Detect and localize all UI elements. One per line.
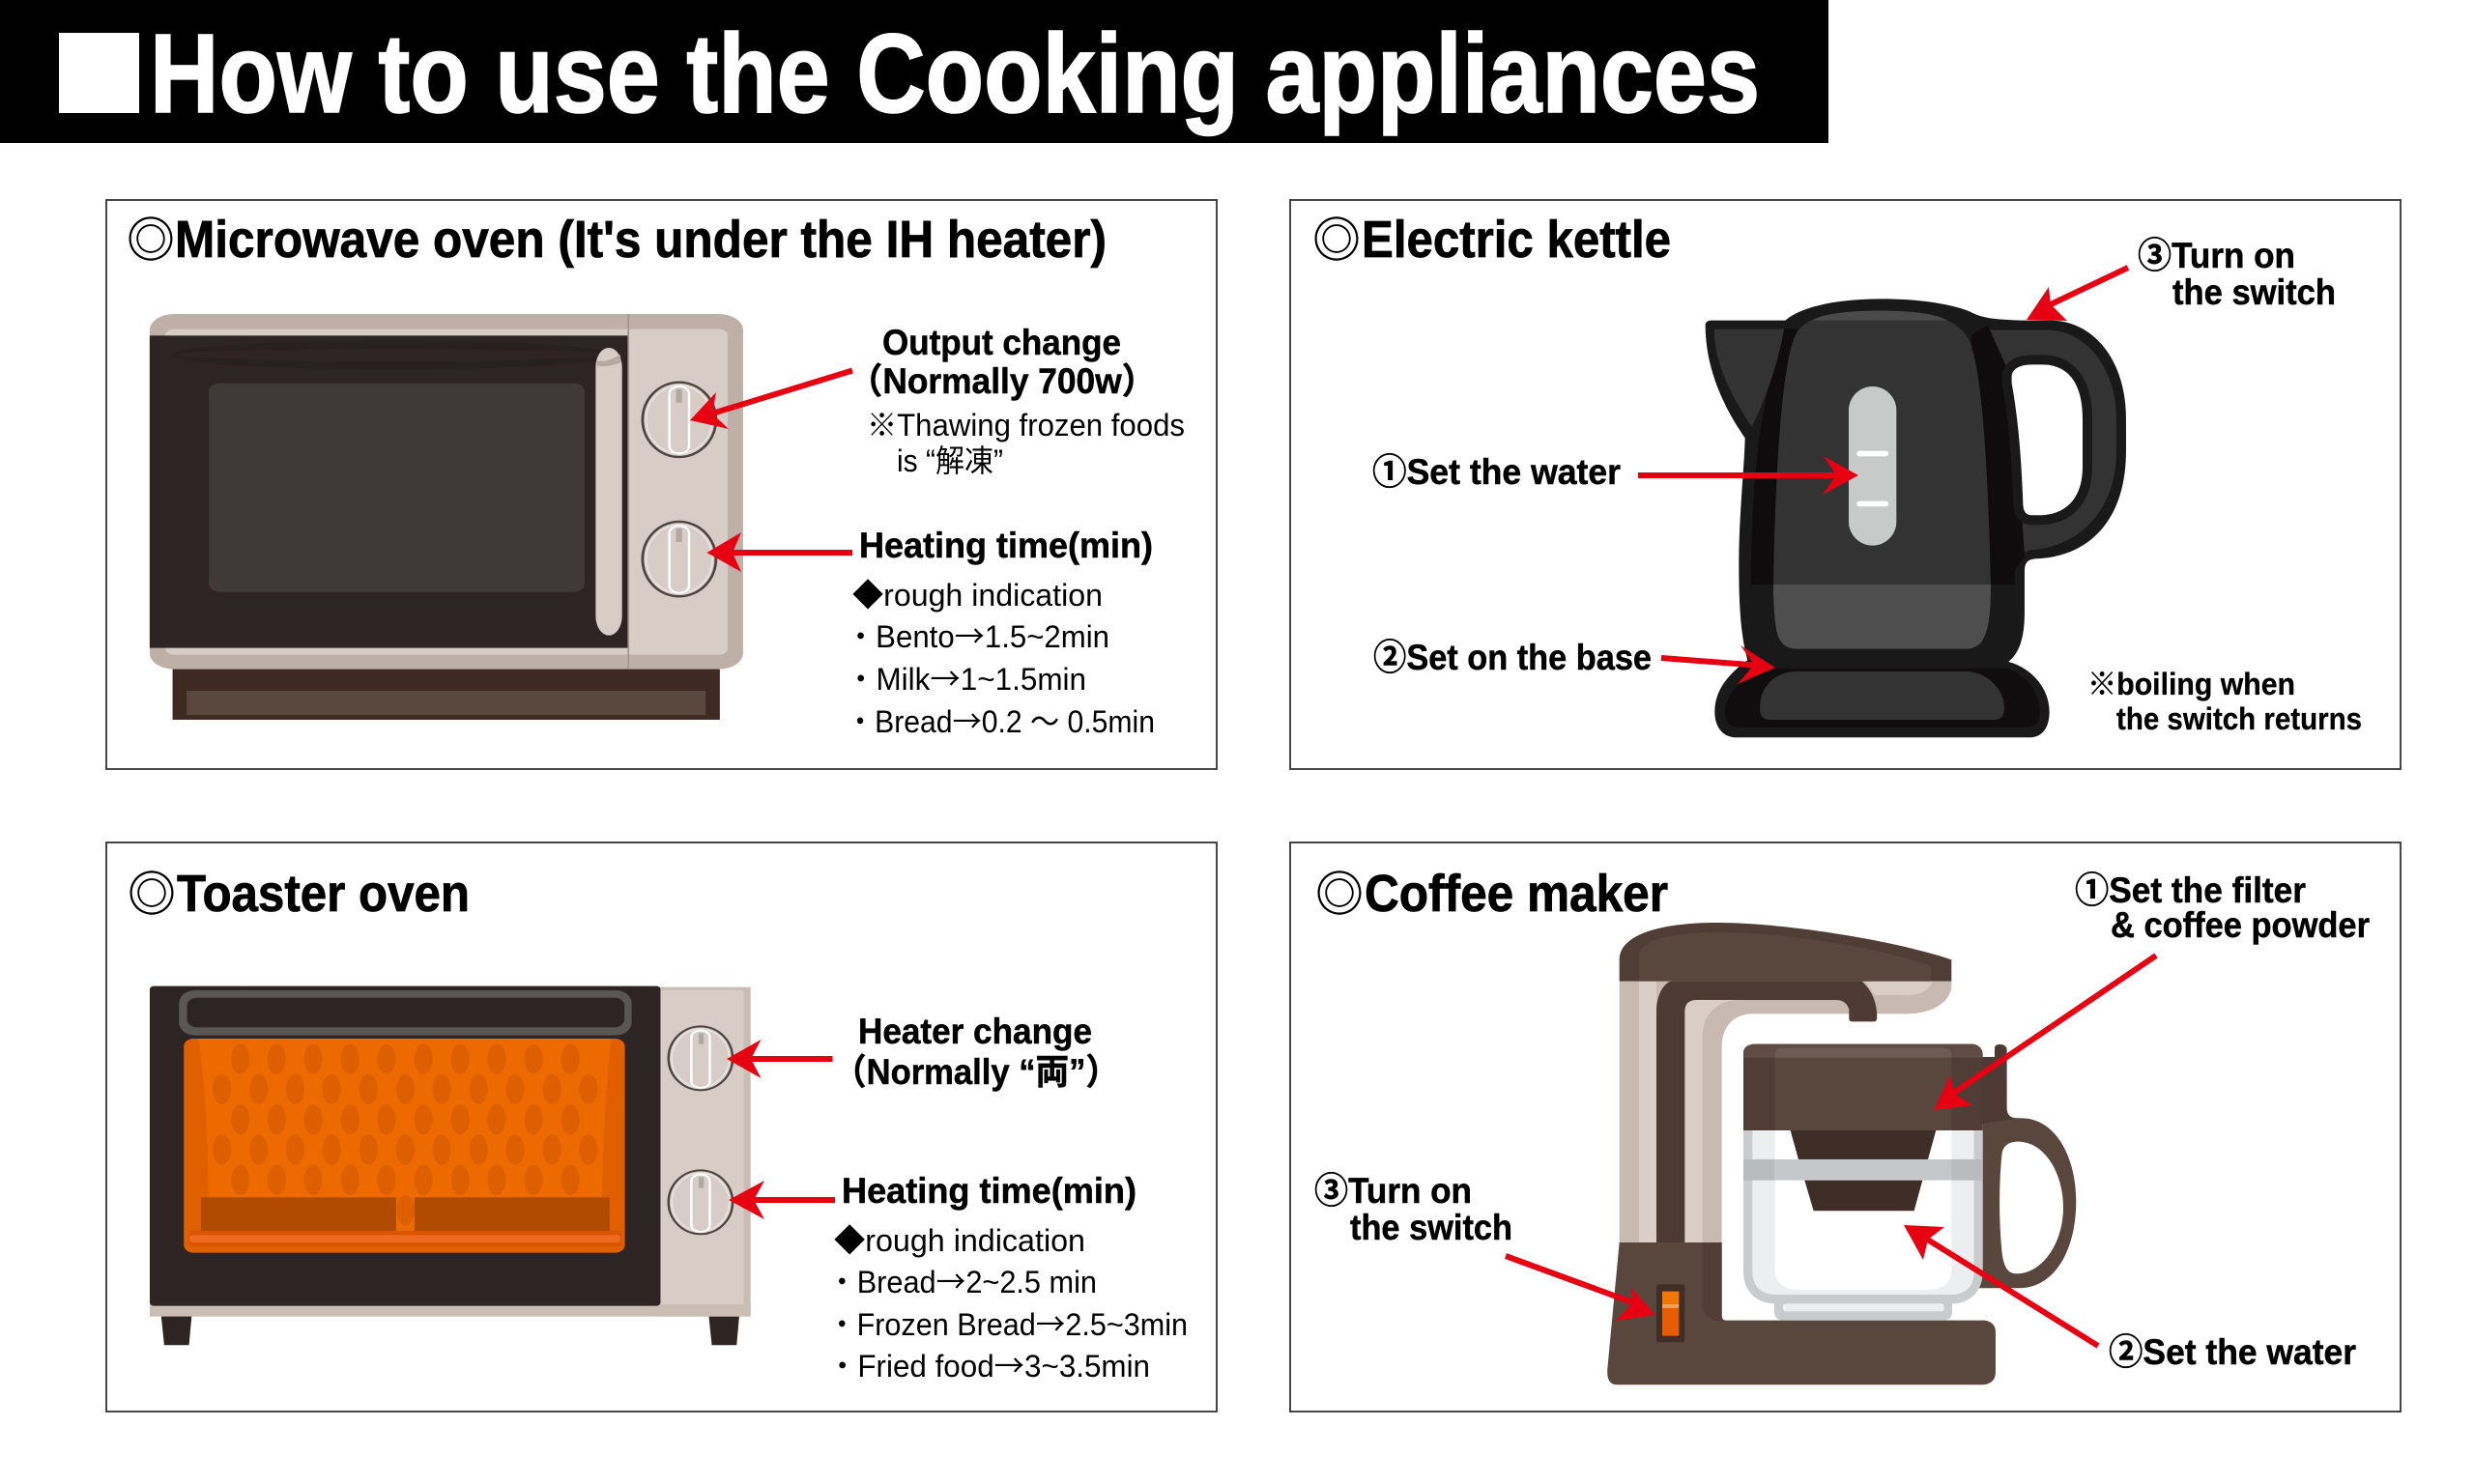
list: rough indication: ・Bento→1.5~2min bbox=[846, 613, 1109, 657]
arrow: set the water bbox=[1638, 456, 1858, 495]
list: rough indication: ・Milk→1~1.5min bbox=[846, 655, 1086, 699]
heading: coffee maker bbox=[1315, 856, 1668, 926]
heading: toaster oven: Toaster oven bbox=[177, 865, 470, 923]
panel: coffee maker bbox=[1290, 842, 2401, 1412]
heading: microwave oven: ◎ bbox=[127, 202, 175, 271]
note: boiling bbox=[2087, 667, 2362, 736]
label: heater change: （Normally “両”） bbox=[833, 1052, 1119, 1092]
note: boiling: ※boiling when bbox=[2087, 667, 2295, 701]
label: output change bbox=[849, 323, 1156, 401]
label: heating time: Heating time(min) bbox=[859, 526, 1153, 565]
panel: microwave oven bbox=[106, 200, 1217, 769]
note: boiling: the switch returns bbox=[2116, 701, 2362, 736]
label: turn on the switch: the switch bbox=[2172, 272, 2336, 312]
label: set on the base: ②Set on the base bbox=[1373, 638, 1652, 677]
label: set the water: ①Set the water bbox=[1372, 452, 1621, 492]
heading: microwave oven: Microwave oven (It's under the IH heater) bbox=[175, 211, 1107, 269]
arrow: turn on the switch bbox=[1506, 1256, 1655, 1321]
note: thawing: is “解凍” bbox=[897, 443, 1003, 478]
list: rough indication: ◆rough indication bbox=[852, 578, 1103, 613]
arrow: filter and coffee powder bbox=[1934, 956, 2156, 1110]
list: rough indication bbox=[846, 578, 1155, 742]
label: output change: （Normally 700w） bbox=[849, 361, 1156, 401]
list: rough indication: ・Fried food→3~3.5min bbox=[827, 1342, 1150, 1386]
list: rough indication: ・Bread→0.2 〜 0.5min bbox=[846, 698, 1155, 742]
note: thawing: ※Thawing frozen foods bbox=[867, 408, 1185, 442]
list: rough indication: ・Bread→2~2.5 min bbox=[827, 1258, 1097, 1302]
list: rough indication: ◆rough indication bbox=[834, 1223, 1085, 1258]
panel: electric kettle bbox=[1290, 200, 2401, 769]
label: turn on the switch bbox=[2138, 236, 2336, 312]
arrow: heater dial bbox=[727, 1040, 833, 1078]
heading: coffee maker: Coffee maker bbox=[1365, 865, 1668, 923]
heading: toaster oven bbox=[128, 856, 470, 926]
arrow: output dial bbox=[690, 371, 852, 429]
arrow: set on the base bbox=[1661, 645, 1775, 684]
label: set the water: ②Set the water bbox=[2109, 1332, 2356, 1372]
arrow: time dial bbox=[729, 1181, 835, 1219]
label: set the filter and coffee powder bbox=[2075, 870, 2370, 945]
list: rough indication: ・Frozen Bread→2.5~3min bbox=[827, 1300, 1188, 1345]
list: rough indication bbox=[827, 1223, 1188, 1386]
title banner: How to use the Cooking appliances bbox=[150, 11, 1760, 136]
label: heater change bbox=[833, 1012, 1119, 1092]
label: set the filter and coffee powder: ①Set the filter bbox=[2075, 870, 2306, 910]
label: turn on the switch: the switch bbox=[1350, 1208, 1512, 1247]
label: turn on the switch: ③Turn on bbox=[1314, 1171, 1472, 1211]
arrow: time dial bbox=[707, 532, 852, 572]
label: turn on the switch bbox=[1314, 1171, 1512, 1247]
label: turn on the switch: ③Turn on bbox=[2138, 236, 2295, 275]
arrow: turn on the switch bbox=[2027, 268, 2128, 321]
label: output change: Output change bbox=[882, 323, 1121, 362]
illustration: electric kettle bbox=[1706, 299, 2126, 737]
heading: coffee maker: ◎ bbox=[1315, 856, 1364, 926]
heading: toaster oven: ◎ bbox=[128, 856, 176, 926]
illustration: microwave oven bbox=[150, 314, 743, 720]
label: heater change: Heater change bbox=[858, 1012, 1092, 1051]
note: thawing bbox=[867, 408, 1185, 478]
panel: toaster oven bbox=[106, 842, 1217, 1412]
illustration: toaster oven bbox=[150, 986, 751, 1345]
heading: electric kettle: ◎ bbox=[1312, 202, 1361, 271]
label: heating time: Heating time(min) bbox=[842, 1171, 1136, 1211]
heading: electric kettle bbox=[1312, 202, 1671, 271]
label: set the filter and coffee powder: & coffee powder bbox=[2111, 905, 2370, 945]
arrow: set the water bbox=[1904, 1225, 2098, 1346]
illustration: coffee maker bbox=[1607, 923, 2076, 1384]
heading: electric kettle: Electric kettle bbox=[1362, 211, 1671, 269]
